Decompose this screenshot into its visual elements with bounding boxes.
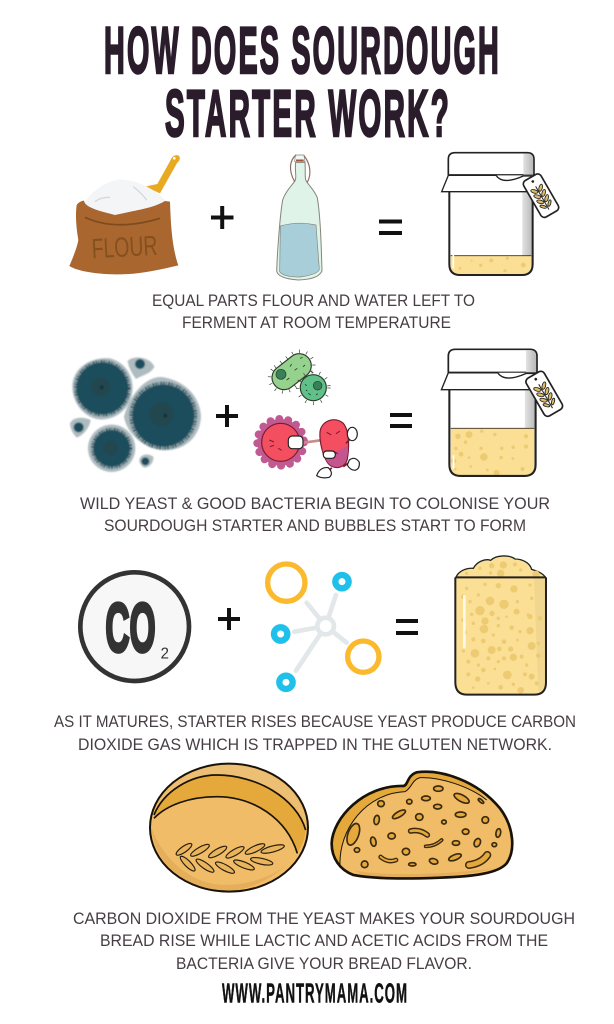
caption 2: SOURDOUGH STARTER AND BUBBLES START TO FORM [104,517,526,535]
icon: water bottle [277,155,322,280]
plus sign 3 [218,608,240,630]
plus sign 1 [211,206,234,229]
icon: CO2 badge: 2 [161,645,169,662]
icon: flour sack with scoop: FLOUR [91,230,158,264]
icon: gluten network [268,564,379,689]
round green bacterium [298,372,329,403]
equals sign 1 [379,220,402,235]
icon: flour sack with scoop [69,155,180,274]
icon: whole sourdough loaf [150,764,308,892]
green rod bacterium [264,346,319,398]
red bean fighter [317,420,359,478]
caption 4 [73,910,575,973]
icon: full jar of risen starter [455,556,546,695]
text: WWW.PANTRYMAMA.COM [222,978,408,1008]
equals sign 2 [390,413,412,428]
icon: CO2 badge [80,572,189,681]
icon: sliced sourdough loaf [332,772,512,878]
caption 2 [80,495,550,535]
caption 4: BACTERIA GIVE YOUR BREAD FLAVOR. [176,955,472,973]
caption 4: BREAD RISE WHILE LACTIC AND ACETIC ACIDS FROM THE [100,932,548,950]
icon: jar with a little starter [442,153,560,275]
caption 1: FERMENT AT ROOM TEMPERATURE [182,314,451,332]
title [104,14,501,150]
icon: jar half full of bubbly starter [441,349,564,476]
caption 1 [152,292,475,332]
red germ [257,419,323,466]
caption 3: AS IT MATURES, STARTER RISES BECAUSE YEAST PRODUCE CARBON [54,713,576,731]
caption 3 [54,713,576,754]
icon: CO2 badge: CO [105,590,156,666]
icon: good bacteria fighting bad germ [257,346,359,478]
caption 2: WILD YEAST & GOOD BACTERIA BEGIN TO COLONISE YOUR [80,495,550,513]
plus sign 2 [216,405,238,427]
caption 4: CARBON DIOXIDE FROM THE YEAST MAKES YOUR SOURDOUGH [73,910,575,928]
caption 1: EQUAL PARTS FLOUR AND WATER LEFT TO [152,292,475,310]
icon: wild yeast colonies [70,358,201,472]
caption 3: DIOXIDE GAS WHICH IS TRAPPED IN THE GLUTEN NETWORK. [78,736,552,754]
equals sign 3 [396,619,418,635]
